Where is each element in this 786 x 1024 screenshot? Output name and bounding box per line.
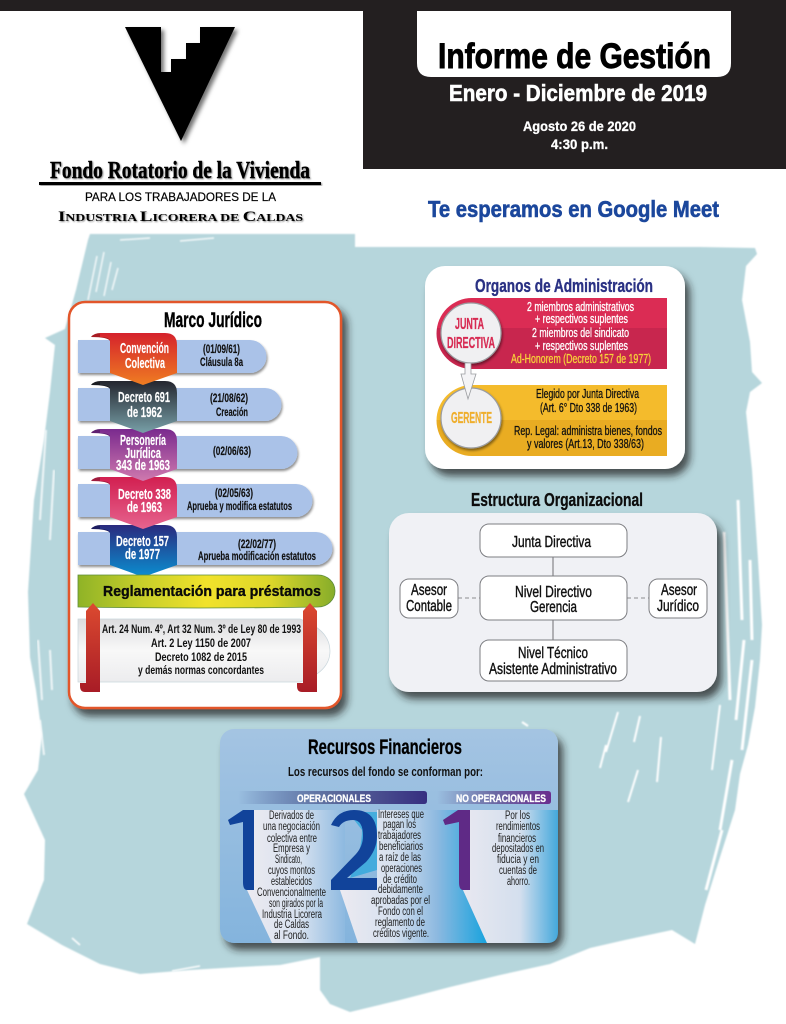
scroll: legal references bbox=[78, 603, 330, 692]
panel: Recursos Financieros bbox=[220, 729, 558, 943]
block: Gerente: Elegido por Junta Directiva bbox=[536, 386, 640, 401]
block: Junta Directiva bbox=[436, 298, 667, 369]
panel: Marco Jurídico bbox=[69, 302, 341, 708]
column 1: Operacional 1: Sindicato, bbox=[275, 854, 302, 866]
scroll: legal references: Decreto 1082 de 2015 bbox=[155, 650, 247, 664]
item: Convención Colectiva: Convención bbox=[120, 341, 169, 357]
column 1: Operacional 1: Derivados de bbox=[269, 810, 314, 822]
heading: Recursos Financieros bbox=[308, 736, 462, 759]
item: Decreto 157 de 1977: Aprueba modificación estatutos bbox=[198, 551, 316, 563]
block: Junta Directiva: DIRECTIVA bbox=[447, 335, 495, 352]
item: Personería Jurídica: (02/06/63) bbox=[213, 446, 251, 458]
column 1: Operacional 1: establecidos bbox=[271, 876, 312, 888]
icon: stepped V bbox=[125, 27, 235, 141]
box: Nivel Técnico: Asistente Administrativo bbox=[489, 661, 617, 678]
panel: Estructura Organizacional chart bbox=[389, 513, 717, 692]
scroll: legal references: Art. 2 Ley 1150 de 2007 bbox=[151, 636, 251, 650]
item: Decreto 338 de 1963: (02/05/63) bbox=[215, 488, 253, 500]
column 2: Operacional 2: trabajadores bbox=[378, 830, 421, 842]
scroll: legal references: y demás normas concordantes bbox=[138, 663, 264, 677]
column 2: Operacional 2: pagan los bbox=[383, 819, 416, 831]
item: Decreto 691 de 1962: de 1962 bbox=[127, 405, 162, 421]
date and time bbox=[523, 118, 636, 152]
block: Junta Directiva: Ad-Honorem (Decreto 157 de 1977) bbox=[511, 351, 651, 366]
item: Decreto 338 de 1963 bbox=[78, 477, 312, 529]
column 1: Operacional 1: Convencionalmente bbox=[257, 887, 326, 899]
column 2: Operacional 2: de crédito bbox=[383, 874, 417, 886]
box: Junta Directiva: Junta Directiva bbox=[512, 534, 591, 551]
box: Asesor Contable: Contable bbox=[406, 598, 452, 615]
column 3: No operacional 1: Por los bbox=[505, 810, 530, 822]
item: Personería Jurídica: Personería bbox=[120, 433, 167, 449]
item: Decreto 157 de 1977 bbox=[78, 525, 332, 577]
header: Operacionales bbox=[238, 791, 427, 805]
header: Operacionales: OPERACIONALES bbox=[297, 793, 371, 805]
column 2: Operacional 2 bbox=[331, 809, 437, 943]
item: Convención Colectiva: (01/09/61) bbox=[203, 344, 240, 356]
background: brush stroke bbox=[24, 234, 762, 1012]
heading: Marco Jurídico bbox=[164, 309, 262, 332]
header: title panel bbox=[363, 0, 786, 169]
item: Decreto 338 de 1963: Decreto 338 bbox=[118, 487, 171, 503]
box: Asesor Contable: Asesor bbox=[411, 582, 447, 599]
item: Convención Colectiva bbox=[78, 333, 266, 385]
column 3: No operacional 1: rendimientos bbox=[496, 821, 540, 833]
header: No operacionales: NO OPERACIONALES bbox=[456, 793, 546, 805]
block: Junta Directiva: 2 miembros del sindicato bbox=[532, 325, 629, 340]
connectors bbox=[552, 557, 554, 640]
column 3: No operacional 1: financieros bbox=[498, 833, 536, 845]
block: Gerente bbox=[436, 385, 667, 456]
header: top black bar bbox=[0, 0, 786, 11]
heading: Organos de Administración bbox=[475, 276, 653, 296]
logo bbox=[39, 27, 321, 225]
banner: Reglamentación para préstamos bbox=[78, 575, 335, 608]
subheading: Los recursos del fondo se conforman por: bbox=[288, 765, 483, 779]
box: Asesor Jurídico bbox=[649, 579, 707, 618]
item: Decreto 691 de 1962: Creación bbox=[216, 407, 248, 419]
item: Convención Colectiva: Colectiva bbox=[125, 356, 166, 372]
column 1: Operacional 1: colectiva entre bbox=[267, 833, 317, 845]
arrow: Junta to Gerente bbox=[461, 363, 476, 399]
item: Personería Jurídica: Jurídica bbox=[125, 446, 162, 462]
item: Convención Colectiva: Cláusula 8a bbox=[200, 357, 243, 369]
column 2: Operacional 2: operaciones bbox=[381, 863, 422, 875]
organization name: Fondo Rotatorio de la Vivienda bbox=[50, 158, 310, 184]
column 2: Operacional 2: créditos vigente. bbox=[373, 928, 429, 940]
block: Gerente: y valores (Art.13, Dto 338/63) bbox=[527, 436, 644, 451]
column 1: Operacional 1: de Caldas bbox=[274, 919, 309, 931]
item: Decreto 157 de 1977: Decreto 157 bbox=[116, 534, 169, 550]
column 3: No operacional 1: fiducia y en bbox=[497, 854, 539, 866]
block: Junta Directiva: JUNTA bbox=[455, 316, 484, 333]
scroll right handle bbox=[297, 603, 317, 692]
title box bbox=[417, 11, 731, 77]
column 3: No operacional 1 bbox=[437, 810, 558, 943]
invitation line: Te esperamos en Google Meet bbox=[428, 196, 719, 222]
header: No operacionales bbox=[437, 791, 551, 805]
item: Decreto 157 de 1977: (22/02/77) bbox=[238, 539, 276, 551]
date and time: Agosto 26 de 2020 bbox=[523, 118, 636, 134]
block: Junta Directiva: + respectivos suplentes bbox=[535, 338, 628, 353]
item: Decreto 157 de 1977: de 1977 bbox=[125, 547, 160, 563]
item: Decreto 691 de 1962: Decreto 691 bbox=[118, 390, 170, 406]
organization subtitle: PARA LOS TRABAJADORES DE LA bbox=[85, 190, 276, 204]
item: Decreto 338 de 1963: Aprueba y modifica estatutos bbox=[187, 501, 292, 513]
column 3: No operacional 1: depositados en bbox=[492, 843, 544, 855]
item: Personería Jurídica: 343 de 1963 bbox=[116, 458, 170, 474]
block: Gerente: GERENTE bbox=[451, 410, 492, 427]
heading: Estructura Organizacional: Estructura Organizacional bbox=[471, 490, 643, 510]
column 2: Operacional 2: debidamente bbox=[378, 884, 423, 896]
banner: Reglamentación para préstamos: Reglamentación para préstamos bbox=[103, 583, 321, 600]
column 3: No operacional 1: ahorro. bbox=[507, 876, 530, 888]
item: Decreto 691 de 1962 bbox=[78, 381, 282, 433]
column 1: Operacional 1: cuyos montos bbox=[268, 865, 315, 877]
scroll left handle bbox=[80, 603, 100, 692]
column 2: Operacional 2: beneficiarios bbox=[379, 841, 423, 853]
box: Nivel Directivo Gerencia bbox=[480, 576, 627, 620]
box: Asesor Contable bbox=[400, 579, 458, 618]
organization subtitle 2: INDUSTRIA LICORERA DE CALDAS bbox=[58, 209, 303, 225]
box: Nivel Técnico: Nivel Técnico bbox=[518, 645, 588, 662]
block: Junta Directiva: + respectivos suplentes bbox=[535, 311, 628, 326]
box: Junta Directiva bbox=[480, 524, 627, 557]
title box: Informe de Gestión bbox=[438, 37, 711, 76]
box: Nivel Directivo Gerencia: Gerencia bbox=[530, 599, 577, 616]
box: Nivel Directivo Gerencia: Nivel Directivo bbox=[515, 584, 592, 601]
column 1: Operacional 1: al Fondo. bbox=[274, 930, 309, 942]
column 2: Operacional 2: reglamento de bbox=[375, 917, 425, 929]
column 1: Operacional 1 bbox=[228, 810, 345, 943]
panel: Organos de Administración bbox=[425, 266, 685, 469]
column 1: Operacional 1: una negociación bbox=[263, 821, 320, 833]
column 2: Operacional 2: a raíz de las bbox=[379, 852, 421, 864]
item: Decreto 691 de 1962: (21/08/62) bbox=[210, 393, 248, 405]
box: Nivel Técnico bbox=[480, 640, 627, 681]
column 2: Operacional 2: aprobadas por el bbox=[371, 895, 430, 907]
box: Asesor Jurídico: Jurídico bbox=[657, 598, 699, 615]
scroll: legal references: Art. 24 Num. 4º, Art 32 Num. 3º de Ley 80 de 1993 bbox=[102, 622, 301, 636]
block: Gerente: (Art. 6° Dto 338 de 1963) bbox=[540, 400, 637, 415]
block: Gerente: Rep. Legal: administra bienes, fondos bbox=[514, 423, 662, 438]
subtitle: Enero - Diciembre de 2019 bbox=[449, 80, 707, 106]
item: Personería Jurídica bbox=[78, 429, 298, 481]
date and time: 4:30 p.m. bbox=[551, 136, 608, 152]
column 2: Operacional 2: Fondo con el bbox=[378, 906, 423, 918]
column 3: No operacional 1: cuentas de bbox=[499, 865, 537, 877]
column 1: Operacional 1: Industria Licorera bbox=[262, 909, 322, 921]
column 2: Operacional 2: Intereses que bbox=[378, 809, 424, 821]
item: Decreto 338 de 1963: de 1963 bbox=[127, 500, 162, 516]
column 1: Operacional 1: son girados por la bbox=[269, 898, 323, 910]
column 1: Operacional 1: Empresa y bbox=[273, 843, 310, 855]
block: Junta Directiva: 2 miembros administrativos bbox=[527, 299, 634, 314]
box: Asesor Jurídico: Asesor bbox=[661, 582, 697, 599]
